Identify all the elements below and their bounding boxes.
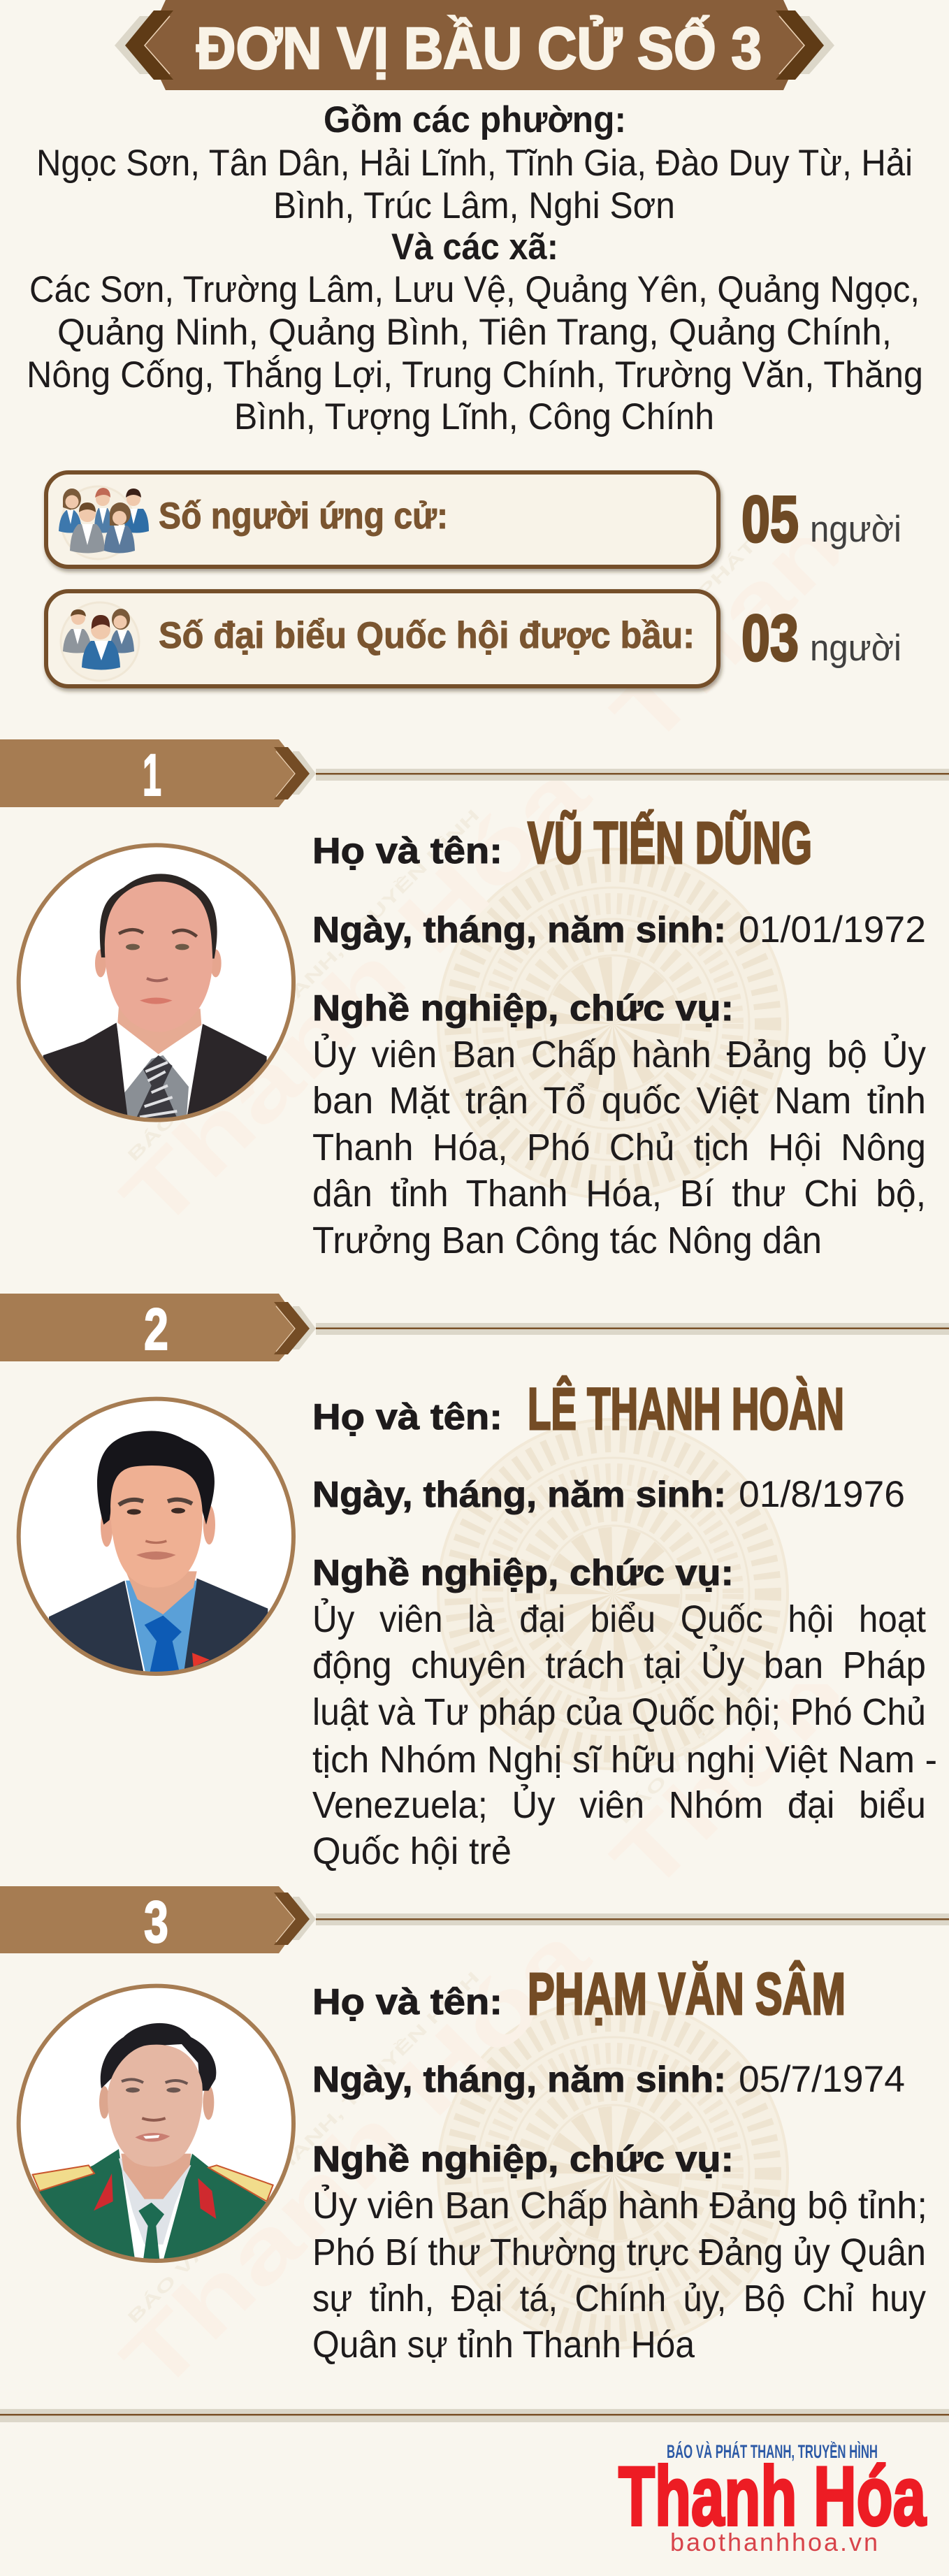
- date of birth: [312, 909, 926, 950]
- value: 05 people: người: [810, 509, 901, 550]
- occupation text: tịch Nhóm Nghị sĩ hữu nghị Việt Nam -: [312, 1739, 937, 1781]
- occupation text: Quân sự tỉnh Thanh Hóa: [312, 2324, 695, 2366]
- value: 03 people: 03: [741, 601, 799, 674]
- icon: group of three people: [61, 602, 139, 681]
- date of birth: 01/01/1972: [739, 909, 926, 950]
- wards and communes text block: Quảng Ninh, Quảng Bình, Tiên Trang, Quảng Chính,: [57, 312, 892, 353]
- candidate 1 details: [312, 810, 926, 1261]
- occupation text: Quốc hội trẻ: [312, 1830, 512, 1872]
- occupation heading: Nghề nghiệp, chức vụ:: [312, 2139, 734, 2180]
- occupation heading: Nghề nghiệp, chức vụ:: [312, 1553, 734, 1593]
- occupation text: Ủy viên Ban Chấp hành Đảng bộ tỉnh;: [312, 2185, 927, 2227]
- occupation text: [312, 1034, 926, 1261]
- candidate 3 details: [312, 1961, 927, 2366]
- icon: group of five people: [59, 486, 149, 559]
- date of birth: [312, 1474, 905, 1515]
- value: 03 people: người: [810, 628, 901, 669]
- watermark: Thanh Hóa left, candidate 1: BÁO VÀ PHÁT THANH, TRUYỀN HÌNH: [124, 806, 484, 1165]
- wards and communes text block: Bình, Trúc Lâm, Nghi Sơn: [273, 185, 675, 226]
- watermark: Thanh Hóa left, candidate 3: BÁO VÀ PHÁT THANH, TRUYỀN HÌNH: [124, 1968, 484, 2327]
- name label and name: Họ và tên:: [312, 831, 502, 871]
- panel: number of candidates: [46, 472, 901, 567]
- name label and name: [312, 1961, 846, 2027]
- section header 1: 1: [143, 742, 161, 808]
- watermark: Thanh Hóa upper right: BÁO VÀ PHÁT THANH, TRUYỀN HÌNH: [614, 322, 949, 681]
- candidate 2 details: [312, 1376, 937, 1872]
- name label and name: VŨ TIẾN DŨNG: [528, 810, 812, 876]
- logo: Thanh Hóa newspaper: baothanhhoa.vn: [670, 2528, 878, 2556]
- wards and communes text block: Và các xã:: [391, 226, 558, 268]
- candidate 3 portrait: [19, 1986, 294, 2263]
- label: number of candidates: Số người ứng cử:: [159, 495, 448, 537]
- occupation text: Ủy viên Ban Chấp hành Đảng bộ Ủy: [312, 1034, 926, 1076]
- bottom divider: [0, 2409, 949, 2422]
- section header 3: 3: [144, 1889, 168, 1955]
- name label and name: Họ và tên:: [312, 1397, 502, 1438]
- name label and name: [312, 810, 812, 876]
- watermark: Thanh Hóa left, candidate 1: [99, 739, 608, 1248]
- title text: ĐƠN VỊ BẦU CỬ SỐ 3: [196, 15, 762, 81]
- label: number of deputies: Số đại biểu Quốc hội được bầu:: [159, 615, 695, 656]
- wards and communes text block: Nông Cống, Thắng Lợi, Trung Chính, Trường Văn, Thăng: [27, 354, 923, 396]
- wards and communes text block: Gồm các phường:: [324, 99, 626, 140]
- date of birth: Ngày, tháng, năm sinh:: [312, 2060, 726, 2100]
- occupation text: Venezuela; Ủy viên Nhóm đại biểu: [312, 1784, 926, 1826]
- occupation text: Trưởng Ban Công tác Nông dân: [312, 1220, 822, 1261]
- title banner: [115, 0, 834, 90]
- name label and name: Họ và tên:: [312, 1982, 502, 2023]
- wards and communes text block: Bình, Tượng Lĩnh, Công Chính: [234, 396, 714, 437]
- date of birth: 05/7/1974: [739, 2059, 905, 2100]
- date of birth: [312, 2059, 905, 2100]
- section header 2: 2: [144, 1296, 168, 1362]
- value: 05 people: 05: [741, 482, 799, 556]
- candidate 1 portrait: [19, 845, 294, 1120]
- occupation text: dân tỉnh Thanh Hóa, Bí thư Chi bộ,: [312, 1173, 926, 1215]
- value: 05 people: [741, 482, 901, 556]
- date of birth: Ngày, tháng, năm sinh:: [312, 1475, 726, 1515]
- watermark: Thanh Hóa left, candidate 1: Thanh Hóa: [103, 744, 608, 1248]
- candidate 2 portrait: [19, 1399, 294, 1676]
- value: 03 people: [741, 601, 901, 674]
- occupation heading: Nghề nghiệp, chức vụ:: [312, 988, 734, 1029]
- watermark: Thanh Hóa left, candidate 3: Thanh Hóa: [103, 1906, 608, 2410]
- watermark: bronze drum, candidate 1: [438, 849, 788, 1199]
- occupation text: Thanh Hóa, Phó Chủ tịch Hội Nông: [312, 1127, 926, 1168]
- watermark: Thanh Hóa left, candidate 3: [99, 1902, 608, 2410]
- occupation text: ban Mặt trận Tổ quốc Việt Nam tỉnh: [312, 1080, 926, 1122]
- section header 3: [0, 1886, 949, 1955]
- watermark: Thanh Hóa lower right: BÁO VÀ PHÁT THANH, TRUYỀN HÌNH: [614, 1468, 949, 1828]
- name label and name: [312, 1376, 844, 1442]
- watermark: bronze drum, candidate 2: [438, 1419, 788, 1769]
- panel: number of deputies elected: [46, 591, 901, 686]
- occupation text: [312, 1598, 937, 1872]
- section header 1: [0, 739, 949, 808]
- occupation text: [312, 2185, 927, 2366]
- occupation text: động chuyên trách tại Ủy ban Pháp: [312, 1644, 926, 1686]
- date of birth: 01/8/1976: [739, 1474, 905, 1515]
- date of birth: Ngày, tháng, năm sinh:: [312, 910, 726, 950]
- watermark: bronze drum, candidate 3: [438, 1999, 788, 2348]
- watermark: Thanh Hóa upper right: [699, 540, 752, 591]
- wards and communes text block: [27, 99, 923, 437]
- watermark: Thanh Hóa lower right: [621, 1686, 749, 1823]
- section header 2: [0, 1294, 949, 1362]
